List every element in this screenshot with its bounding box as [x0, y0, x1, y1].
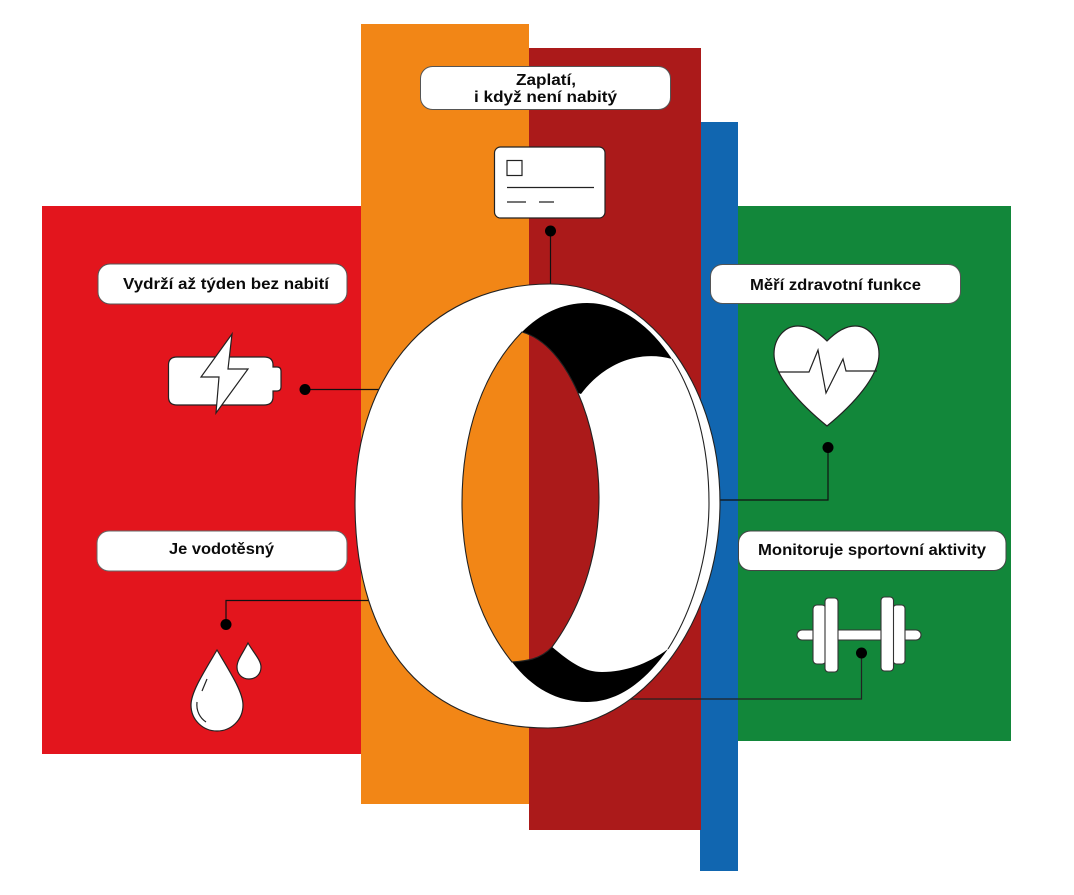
dot: battery [300, 384, 310, 395]
callout: battery life [98, 264, 347, 304]
hole: orange part [462, 332, 529, 662]
ring: upper black band [522, 303, 672, 394]
label pill [738, 531, 1006, 570]
ring illustration [355, 284, 720, 728]
label pill [98, 264, 347, 304]
connector: water drop [226, 600, 375, 624]
connector: battery [305, 388, 380, 390]
label text: Vydrží až týden bez nabití [123, 276, 330, 293]
label text line 2: i když není nabitý [474, 89, 617, 106]
ring: hole [455, 325, 599, 670]
panel: red background [42, 206, 361, 754]
dot: heart [822, 442, 834, 453]
icon: dumbbell [797, 597, 921, 672]
connector: payment card [550, 231, 552, 288]
panel: dark red stripe [529, 48, 701, 830]
callout: health functions [710, 264, 960, 304]
icon: water drops [191, 643, 261, 731]
dot: dumbbell [856, 648, 867, 658]
callout: sport activity [738, 531, 1006, 570]
connector: dumbbell [630, 653, 862, 699]
label pill [710, 264, 960, 304]
dot: water [220, 619, 232, 630]
ring: lower black band [512, 646, 668, 702]
label pill [420, 66, 670, 110]
hole: dark red part [462, 332, 599, 662]
label pill [97, 531, 347, 571]
label text: Monitoruje sportovní aktivity [758, 542, 986, 559]
hole: outline [462, 332, 599, 662]
callout: waterproof [97, 531, 347, 571]
ring: inner right line [668, 359, 709, 649]
label text: Zaplatí, [516, 72, 576, 89]
dot: card [545, 226, 556, 236]
panel: green background [738, 206, 1011, 741]
icon: heart with ECG [774, 326, 879, 426]
panel: blue stripe [700, 122, 738, 871]
label text: Měří zdravotní funkce [750, 277, 921, 294]
label text: Je vodotěsný [169, 541, 274, 558]
callout: contactless payment [420, 66, 670, 110]
connector: heart [716, 447, 828, 500]
icon: battery with bolt [168, 334, 281, 413]
icon: payment card [494, 147, 605, 218]
panel: orange stripe [361, 24, 529, 804]
ring: outer body [355, 284, 720, 728]
